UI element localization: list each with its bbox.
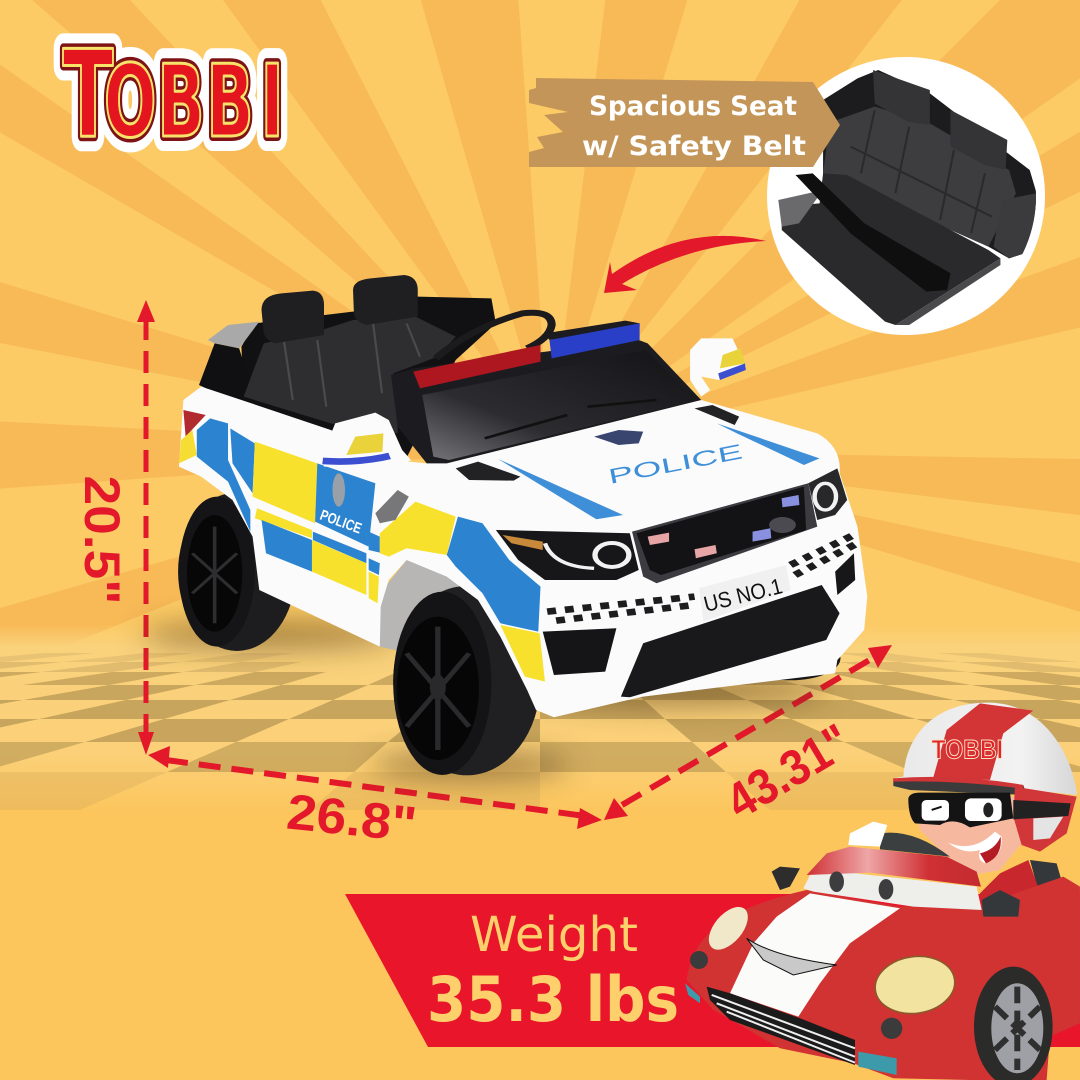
car body <box>179 387 867 717</box>
seat frame <box>823 70 1037 258</box>
mascot driver and red car <box>685 703 1080 1080</box>
plate text: US NO.1 <box>701 573 785 617</box>
helmet brim <box>893 777 1027 795</box>
safety belt <box>796 173 950 292</box>
car wheel <box>974 967 1053 1080</box>
left mirror <box>322 413 411 468</box>
wheel well <box>380 560 482 660</box>
helmet logo: TOBBI <box>931 734 1003 764</box>
white racing stripe <box>730 893 900 1017</box>
logo: Tobbi: TOBBI <box>63 24 284 165</box>
dimension: height 20.5 <box>74 300 155 755</box>
roof light bar <box>413 321 640 388</box>
side box <box>994 193 1037 258</box>
ear guard <box>1013 787 1077 852</box>
logo: Tobbi: TOBBI <box>63 24 284 165</box>
number plate <box>699 565 790 622</box>
side livery <box>179 410 545 682</box>
hood vents <box>456 405 739 481</box>
door police text: POLICE <box>318 507 364 537</box>
windshield frame <box>391 340 701 463</box>
steering wheel <box>880 833 950 857</box>
right mirror <box>690 338 746 397</box>
emblem <box>747 938 837 975</box>
cabin tub <box>199 297 496 467</box>
checker strips <box>547 533 857 621</box>
steering wheel <box>436 313 552 358</box>
seat and body <box>980 860 1063 913</box>
car headlights <box>701 900 959 1019</box>
car mirror <box>772 867 800 890</box>
weight banner: Weight <box>470 907 638 963</box>
dimension: length 43.31 <box>604 645 892 830</box>
grille <box>632 483 817 583</box>
car grille <box>707 987 855 1065</box>
arm <box>982 890 1020 917</box>
front wheel <box>393 586 541 775</box>
hood badge <box>594 430 643 445</box>
left floor <box>778 192 818 226</box>
windshield glass <box>422 350 697 460</box>
face <box>913 793 1022 875</box>
car body <box>687 877 1080 1080</box>
checkered floor <box>0 625 1080 811</box>
rear wheel <box>178 492 296 651</box>
left headlight <box>496 530 639 580</box>
dimension: width 26.8: 26.8" <box>284 783 419 853</box>
goggles <box>908 793 1071 827</box>
glove <box>848 822 887 847</box>
wipers <box>485 400 657 438</box>
arrow: seat pointer <box>604 236 766 293</box>
bumper <box>621 585 840 697</box>
wooden sign: spacious seat: w/ Safety Belt <box>582 131 806 162</box>
helmet <box>893 703 1077 795</box>
teal lamps and fog lights <box>685 951 902 1075</box>
police car <box>140 275 867 779</box>
wooden sign: spacious seat <box>529 78 840 167</box>
dimension: width 26.8 <box>148 746 602 853</box>
headrest right <box>950 110 1007 170</box>
seat back <box>823 107 1016 247</box>
right headlight <box>808 468 847 520</box>
lower intake <box>543 628 616 675</box>
seat detail circle <box>767 57 1045 335</box>
seats <box>244 275 456 433</box>
logo: Tobbi: TOBBI <box>63 24 284 165</box>
dimension: height 20.5: 20.5" <box>74 476 130 604</box>
seat stitching <box>851 110 992 233</box>
car shadow <box>140 621 830 779</box>
weight banner <box>345 894 1080 1047</box>
hood police text: POLICE <box>607 440 744 489</box>
wooden sign: spacious seat: Spacious Seat <box>589 91 797 122</box>
weight banner: 35.3 lbs <box>427 963 679 1036</box>
hood stripes <box>498 423 820 519</box>
far front wheel <box>740 636 840 680</box>
seat base <box>782 173 1000 325</box>
dimension: length 43.31: 43.31" <box>716 713 860 830</box>
right intake <box>835 553 855 595</box>
windscreen <box>803 847 982 910</box>
headrest left <box>873 70 930 125</box>
front lip <box>895 258 1000 325</box>
mouth <box>948 832 1002 863</box>
